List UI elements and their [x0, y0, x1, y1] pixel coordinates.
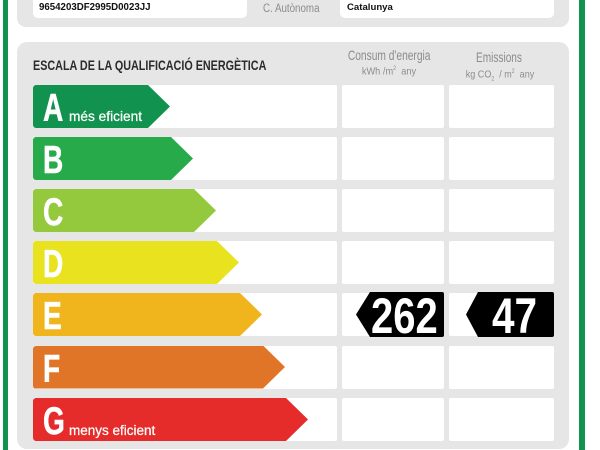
rating arrow D [33, 241, 239, 284]
letter A: A [43, 87, 63, 130]
badge: energy consumption 262 [356, 292, 444, 337]
panel: property data [17, 0, 569, 27]
letter F: F [43, 348, 60, 390]
value 47: 47 [492, 288, 537, 344]
letter D: D [43, 243, 63, 286]
letter C: C [43, 191, 63, 234]
rating arrow E [33, 293, 262, 336]
heading: ESCALA DE LA QUALIFICACIÓ ENERGÈTICA [33, 57, 266, 73]
value 262: 262 [371, 288, 438, 344]
cadastral reference: 9654203DF2995D0023JJ [39, 2, 151, 13]
rating arrow A [33, 85, 170, 128]
letter E: E [43, 295, 62, 338]
letter G: G [43, 400, 65, 443]
rating arrow B [33, 137, 193, 180]
green frame left line [3, 0, 8, 450]
rating arrow C [33, 189, 216, 232]
green frame right line [578, 0, 585, 450]
reference field [33, 0, 247, 18]
community value: Catalunya [347, 2, 393, 13]
rating arrow G [33, 398, 308, 441]
badge: emissions 47 [466, 292, 554, 337]
letter B: B [43, 139, 63, 182]
rating arrow F [33, 346, 285, 388]
column unit: emissions: kg CO2 / m2 any [466, 68, 534, 83]
label: least efficient: menys eficient [69, 423, 155, 438]
community field [340, 0, 554, 18]
label: autonomous community: C. Autònoma [263, 3, 320, 15]
label: most efficient: més eficient [69, 109, 142, 124]
column heading: emissions: Emissions [476, 49, 521, 65]
column heading: energy consumption: Consum d'energia [348, 47, 430, 63]
column unit: energy consumption: kWh /m2 any [362, 66, 416, 78]
